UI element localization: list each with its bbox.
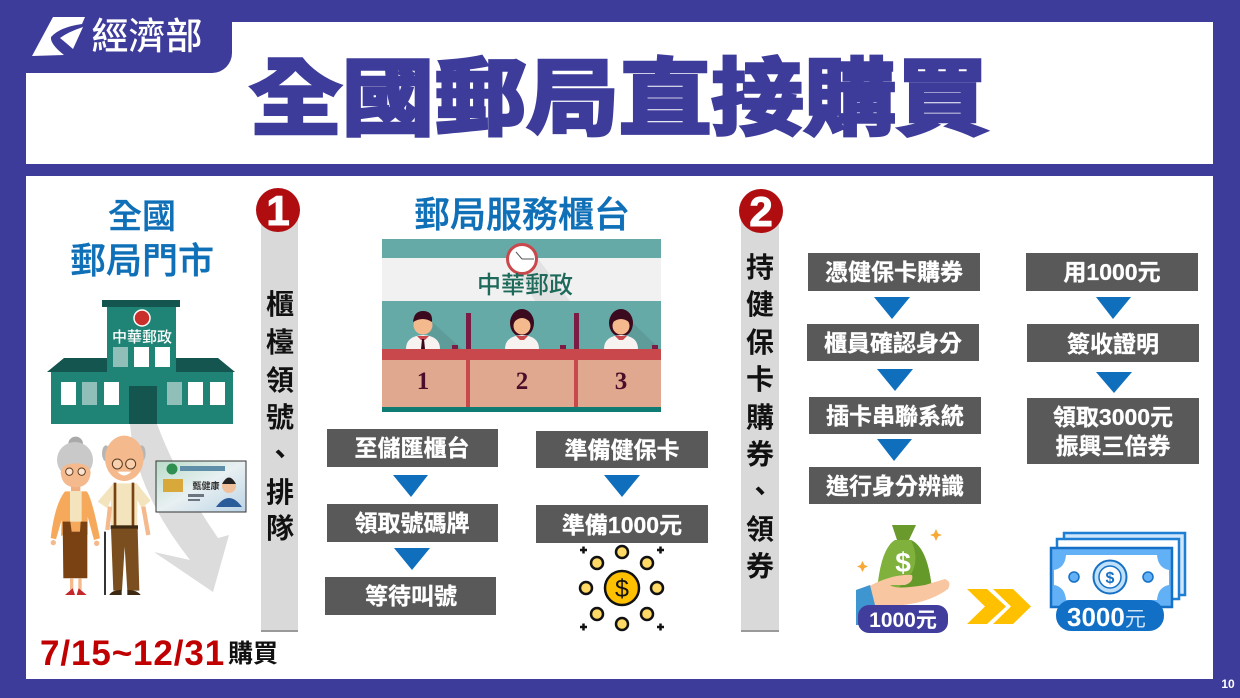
ministry name: 經濟部	[92, 16, 202, 57]
flow: health card purchase steps: 進行身分辨識	[826, 473, 964, 499]
step 1 side bar: 櫃	[266, 289, 294, 320]
purchase dates: 購買	[228, 640, 278, 668]
icon: elderly woman	[51, 437, 100, 595]
flow: voucher exchange steps: 簽收證明	[1067, 331, 1159, 357]
step 1 side bar	[261, 205, 298, 632]
illustration: post office counter: 中華郵政	[477, 272, 573, 299]
step 2 side bar	[741, 205, 779, 632]
step 2 side bar: 保	[746, 327, 774, 358]
step 1 side bar: 檯	[266, 327, 294, 358]
heading: nationwide post offices: 全國	[108, 198, 176, 236]
step 1 side bar: 隊	[266, 513, 294, 544]
step 2 number badge	[739, 188, 783, 235]
step 1 side bar: 領	[266, 365, 294, 396]
icon: ministry emblem	[32, 17, 85, 56]
icon: hand holding money bag: 1000元	[869, 609, 937, 632]
icon: banknotes: 3000元	[1067, 602, 1146, 632]
step 2 side bar: 購	[746, 402, 774, 433]
illustration: post office counter: 3	[615, 368, 627, 395]
panel: main content	[26, 176, 1213, 679]
icon: banknotes: $	[1106, 570, 1115, 587]
flow: health card purchase steps: 插卡串聯系統	[826, 403, 964, 429]
step 1 side bar: 排	[266, 477, 294, 508]
flow: voucher exchange steps: 振興三倍券	[1056, 433, 1170, 459]
flow: voucher exchange steps: 用1000元	[1063, 259, 1161, 285]
title: 全國郵局直接購買	[249, 52, 989, 146]
page number: 10	[1221, 677, 1235, 691]
flow: voucher exchange steps: 領取3000元	[1053, 404, 1173, 430]
illustration: post office counter	[382, 239, 661, 412]
arrow: double chevron	[967, 589, 1031, 624]
icon: post office building	[47, 300, 235, 424]
flow: preparation steps	[536, 431, 708, 543]
illustration: post office counter: 1	[417, 368, 429, 395]
flow: preparation steps: 準備健保卡	[564, 437, 680, 463]
icon: hand holding money bag	[856, 525, 949, 633]
flow: health card purchase steps: 櫃員確認身分	[824, 330, 962, 356]
step 2 number badge: 2	[749, 188, 773, 235]
icon: banknotes	[1051, 533, 1185, 632]
clerk 3	[604, 309, 660, 349]
step 2 side bar: 、	[746, 476, 774, 507]
panel: title banner	[26, 22, 1213, 164]
flow: preparation steps: 準備1000元	[562, 512, 682, 538]
flow: counter queue steps: 領取號碼牌	[354, 510, 470, 536]
clerk 2	[505, 309, 539, 349]
icon: health insurance card: 甄健康	[192, 480, 220, 491]
step 2 side bar: 領	[746, 514, 774, 545]
icon: elderly man	[98, 436, 151, 595]
flow: counter queue steps	[325, 429, 498, 615]
flow: health card purchase steps	[807, 253, 981, 504]
icon: hand holding money bag: $	[895, 547, 911, 578]
heading: nationwide post offices	[70, 198, 214, 281]
step 2 side bar: 持	[746, 252, 774, 283]
illustration: post office counter: 2	[516, 368, 528, 395]
step 1 number badge	[256, 187, 300, 234]
ministry logo tab	[26, 16, 232, 73]
step 2 side bar: 券	[746, 439, 774, 470]
heading: counter: 郵局服務櫃台	[414, 194, 630, 235]
step 2 side bar: 卡	[746, 364, 774, 395]
clerk 1	[406, 311, 462, 349]
purchase dates: 7/15~12/31	[40, 634, 225, 673]
flow: counter queue steps: 等待叫號	[365, 583, 457, 609]
step 2 side bar: 健	[746, 289, 774, 320]
step 1 number badge: 1	[266, 187, 290, 234]
icon: coin network: $	[615, 575, 629, 603]
flow: counter queue steps: 至儲匯櫃台	[354, 435, 470, 461]
step 2 side bar: 券	[746, 551, 774, 582]
step 1 side bar: 、	[266, 439, 294, 470]
flow: voucher exchange steps	[1026, 253, 1199, 464]
step 1 side bar: 號	[266, 402, 294, 433]
icon: post office building: 中華郵政	[112, 329, 172, 346]
heading: nationwide post offices: 郵局門市	[70, 240, 214, 281]
flow: health card purchase steps: 憑健保卡購券	[825, 259, 963, 285]
icon: coin network	[580, 546, 664, 630]
icon: health insurance card	[156, 461, 246, 512]
icon: gray curved arrow	[130, 424, 229, 592]
